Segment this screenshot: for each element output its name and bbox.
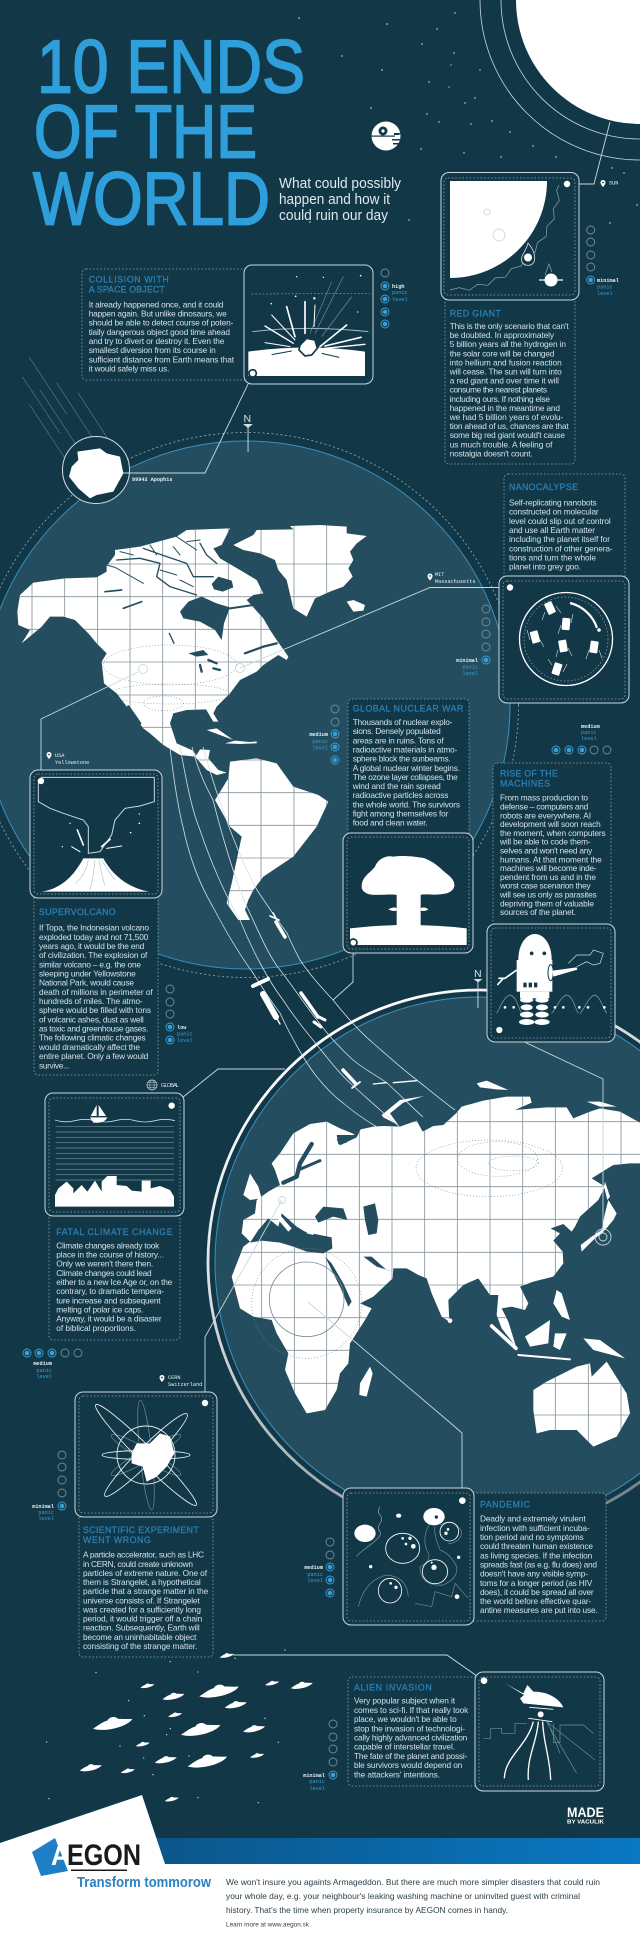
- body text: selves and won't need any: [500, 846, 593, 856]
- body text: [56, 1240, 173, 1333]
- body text: happen again. But unlike dinosaurs, we: [89, 308, 227, 318]
- panic level: low: panic: [177, 1032, 193, 1038]
- illustration: impact: [244, 265, 373, 384]
- body text: planet into grey goo.: [509, 562, 581, 572]
- body text: The following climatic changes: [39, 1033, 146, 1043]
- location: yellowstone: USA: [55, 753, 65, 759]
- panic level: minimal: level: [38, 1516, 54, 1522]
- meteor trails: [22, 357, 115, 461]
- panel: scientific experiment went wrong: [32, 1375, 217, 1657]
- panic level: low: [166, 985, 193, 1044]
- title: WORLD: [33, 156, 270, 240]
- body text: tion period and no symptoms: [480, 1532, 584, 1542]
- location: MIT: MIT: [435, 572, 444, 578]
- body text: the whole world. The survivors: [353, 799, 460, 809]
- body text: be doubted. In approximately: [450, 330, 555, 340]
- body text: it would safely miss us.: [89, 364, 169, 374]
- body text: sphere would be filled with tons: [39, 1005, 151, 1015]
- footer text: history. That's the time when property insurance by AEGON comes in handy.: [226, 1905, 508, 1915]
- subtitle: [279, 176, 402, 224]
- illustration: robot: [487, 924, 615, 1042]
- body text: reaction. Subsequently, Earth will: [83, 1623, 200, 1633]
- panel: alien invasion: [303, 1672, 604, 1792]
- leaders: [41, 122, 610, 1681]
- body text: entire planet. Only a few would: [39, 1051, 149, 1061]
- body text: of volcanic ashes, dust as well: [39, 1014, 144, 1024]
- logo: aegon: EGON: [67, 1839, 141, 1872]
- body text: in CERN, could create unknown: [83, 1559, 193, 1569]
- body text: including the planet itself for: [509, 534, 610, 544]
- location: global: [147, 1080, 179, 1090]
- panic level: high: [381, 269, 408, 328]
- body text: stop the invasion of technologi-: [354, 1723, 465, 1733]
- sun: [480, 0, 640, 160]
- body text: From mass production to: [500, 793, 588, 803]
- map: north and south america: [17, 525, 366, 920]
- body text: us much trouble. A feeling of: [450, 439, 553, 449]
- panic level: medium: panic: [312, 739, 328, 745]
- heading: MACHINES: [500, 779, 550, 789]
- body text: Self-replicating nanobots: [509, 498, 597, 508]
- location circles: [138, 664, 611, 1245]
- body text: food and clean water.: [353, 818, 428, 828]
- body text: cally highly advanced civilization: [354, 1732, 468, 1742]
- impact circle: africa: [269, 1262, 344, 1337]
- dotted radius rings: north america: [103, 645, 237, 711]
- body text: pendent from us and in the: [500, 872, 596, 882]
- location: global: GLOBAL: [161, 1083, 179, 1089]
- body text: contrary, to dramatic tempera-: [56, 1286, 164, 1296]
- body text: humans. At that moment the: [500, 854, 602, 864]
- body text: National Park, would cause: [39, 978, 134, 988]
- credit: made by vaculik: MADE: [567, 1805, 604, 1820]
- panic level: minimal: [32, 1451, 66, 1522]
- icon: rockets: [253, 913, 360, 1088]
- body text: tion ahead of us, chances are that: [450, 421, 569, 431]
- credit: made by vaculik: BY VACULIK: [567, 1820, 604, 1826]
- location: sun: [600, 180, 618, 187]
- panic level: minimal: panic: [597, 284, 613, 290]
- body text: areas are in ruins. Tons of: [353, 735, 444, 745]
- body text: happened in the meantime and: [450, 403, 560, 413]
- body text: consisting of the strange matter.: [83, 1641, 197, 1651]
- location: sun: SUN: [609, 180, 618, 186]
- body text: place, we wouldn't be able to: [354, 1714, 457, 1724]
- credit: made by vaculik: [567, 1805, 604, 1826]
- heading: GLOBAL NUCLEAR WAR: [353, 704, 463, 714]
- body text: exploded today and not 71,500: [39, 932, 149, 942]
- heading: WENT WRONG: [83, 1535, 151, 1545]
- footer text: Learn more at www.aegon.sk: [226, 1923, 310, 1929]
- illustration: nanobots: [499, 576, 629, 703]
- body text: [38, 923, 153, 1070]
- body text: Climate changes already took: [56, 1240, 160, 1250]
- body text: would dramatically affect the: [38, 1042, 140, 1052]
- panel: nanocalypse: [428, 474, 629, 703]
- body text: spreads fast (as e.g. flu does) and: [480, 1560, 597, 1570]
- illustration: mushroom cloud: [343, 833, 473, 953]
- subtitle: What could possibly: [279, 176, 402, 192]
- panic level: medium: medium: [309, 732, 328, 738]
- title: OF THE: [34, 90, 257, 174]
- panic level: minimal: minimal: [32, 1504, 54, 1510]
- location: CERN: Switzerland: [168, 1382, 202, 1388]
- panic level: medium: panic: [307, 1572, 323, 1578]
- white footer shape: [0, 1795, 640, 1943]
- subtitle: happen and how it: [279, 192, 390, 208]
- panel: red giant: [441, 172, 619, 464]
- panic level: medium: panic: [36, 1368, 52, 1374]
- heading: SCIENTIFIC EXPERIMENT: [83, 1525, 199, 1535]
- panic level: medium: level: [312, 746, 328, 752]
- illustration: flooded city: [45, 1093, 184, 1216]
- body text: universe consists of. If Strangelet: [83, 1595, 200, 1605]
- body text: sufficient distance from Earth means that: [89, 354, 235, 364]
- panel: pandemic: [304, 1488, 606, 1625]
- heading: COLLISION WITH: [89, 275, 169, 285]
- body text: Very popular subject when it: [354, 1696, 456, 1706]
- body text: machines will become inde-: [500, 863, 597, 873]
- body text: Only we weren't there then.: [56, 1259, 153, 1269]
- body text: and try to divert or destroy it. Even the: [89, 336, 225, 346]
- body text: Thousands of nuclear explo-: [353, 717, 453, 727]
- location: CERN: CERN: [168, 1375, 180, 1381]
- body text: of biblical proportions.: [56, 1323, 136, 1333]
- panic level: minimal: panic: [38, 1510, 54, 1516]
- globe: americas: [0, 432, 518, 978]
- footer: [0, 1795, 640, 1943]
- body text: The fate of the planet and possi-: [354, 1751, 468, 1761]
- panic level: medium: [304, 1538, 334, 1597]
- illustration: red giant: [441, 172, 579, 300]
- body text: [499, 793, 606, 917]
- body text: into hellium and fusion reaction: [450, 357, 562, 367]
- panic level: medium: [309, 705, 339, 764]
- panic level: minimal: minimal: [597, 278, 619, 284]
- body text: [449, 321, 569, 458]
- panel: global nuclear war: [309, 699, 473, 953]
- heading: SUPERVOLCANO: [39, 907, 116, 917]
- body text: does), it could be spread all over: [480, 1587, 594, 1597]
- location: yellowstone: Yellowstone: [55, 760, 89, 766]
- body text: radioactive materials in atmo-: [353, 744, 458, 754]
- panic level: medium: level: [307, 1578, 323, 1584]
- location: MIT: [428, 572, 475, 585]
- body text: comes to sci-fi. If that really took: [354, 1705, 469, 1715]
- body text: constructed on molecular: [509, 507, 599, 517]
- panic level: minimal: [456, 605, 490, 677]
- body text: we had 5 billion years of evolu-: [449, 412, 564, 422]
- panic level: medium: level: [581, 736, 597, 742]
- body text: survive...: [39, 1060, 69, 1070]
- body text: Climate changes could lead: [56, 1268, 152, 1278]
- panic level: minimal: level: [462, 671, 478, 677]
- body text: [352, 717, 460, 828]
- body text: the world before effective quar-: [480, 1596, 592, 1606]
- body text: particle that a strange matter in the: [83, 1586, 209, 1596]
- illustration: volcano: [30, 770, 162, 898]
- body text: including ours. If nothing else: [450, 394, 550, 404]
- body text: will be able to code them-: [499, 837, 591, 847]
- heading: NANOCALYPSE: [509, 482, 578, 492]
- globe: eurasia and africa: [200, 990, 640, 1534]
- heading: ALIEN INVASION: [354, 1683, 432, 1693]
- body text: [354, 1696, 469, 1779]
- body text: some big red giant would't cause: [450, 430, 565, 440]
- title: 10 ENDS: [37, 24, 305, 108]
- location: MIT: Massachusetts: [435, 579, 475, 585]
- body text: construction of other genera-: [509, 543, 613, 553]
- body text: years ago, it would be the end: [39, 941, 145, 951]
- body text: defense – computers and: [500, 802, 589, 812]
- body text: level could slip out of control: [509, 516, 611, 526]
- body text: infection with sufficient incuba-: [480, 1523, 590, 1533]
- panic level: minimal: minimal: [456, 658, 478, 664]
- blue band: [150, 1838, 640, 1864]
- body text: fight among themselves for: [353, 808, 449, 818]
- body text: of civilization. The explosion of: [39, 950, 148, 960]
- compass north: americas: [243, 413, 253, 452]
- body text: radioactive particles across: [353, 790, 448, 800]
- body text: ble survivors would depend on: [354, 1760, 463, 1770]
- body text: them is Strangelet, a hypothetical: [83, 1577, 201, 1587]
- compass north: americas: N: [244, 413, 251, 425]
- body text: A particle accelerator, such as LHC: [83, 1550, 204, 1560]
- body text: hundreds of miles. The atmo-: [39, 996, 143, 1006]
- label: apophis: 99942 Apophis: [132, 477, 172, 483]
- subtitle: could ruin our day: [279, 208, 389, 224]
- body text: death of millions in perimeter of: [39, 987, 153, 997]
- body text: sphere block the sunbeams.: [353, 754, 451, 764]
- body text: [480, 1514, 598, 1615]
- illustration: atom around earth: [75, 1392, 217, 1517]
- body text: as toxic and greenhouse gases.: [39, 1024, 148, 1034]
- body text: Deadly and extremely virulent: [480, 1514, 586, 1524]
- body text: If Topa, the Indonesian volcano: [39, 923, 149, 933]
- asteroid apophis: [22, 357, 172, 504]
- body text: [82, 1550, 209, 1651]
- panic level: medium: [23, 1349, 82, 1380]
- panic level: medium: level: [36, 1374, 52, 1380]
- body text: melting of polar ice caps.: [56, 1304, 143, 1314]
- body text: similar volcano – e.g. the one: [39, 959, 141, 969]
- body text: will cease. The sun will turn into: [449, 366, 562, 376]
- body text: could threaten human existence: [480, 1541, 593, 1551]
- panic level: low: level: [177, 1038, 193, 1044]
- footer text: We won't insure you againts Armageddon. But there are much more simpler disasters that could ruin: [226, 1877, 600, 1887]
- body text: tially dangerous object good time ahead: [89, 327, 230, 337]
- footer text: your whole day, e.g. your neighbour's leaking washing machine or uninvited guest with criminal: [226, 1891, 580, 1901]
- ufo fleet: [46, 1649, 313, 1803]
- logo: aegon: A: [51, 1839, 70, 1872]
- panel: rise of the machines: [487, 724, 615, 1042]
- tagline: Transform tommorow: [77, 1874, 211, 1891]
- location: yellowstone: [46, 752, 89, 766]
- body text: period, it would trigger off a chain: [83, 1614, 203, 1624]
- heading: A SPACE OBJECT: [89, 285, 165, 295]
- body text: worst case scenarion they: [499, 881, 592, 891]
- compass north: eurasia: N: [474, 968, 482, 980]
- body text: the solar core will be changed: [450, 348, 555, 358]
- trajectories and rockets: [170, 747, 455, 1127]
- body text: should be able to detect course of poten-: [89, 318, 234, 328]
- logo: aegon: [32, 1838, 141, 1876]
- body text: development will soon reach: [500, 819, 601, 829]
- panel: supervolcano: [30, 752, 193, 1075]
- body text: and use all Earth matter: [509, 525, 595, 535]
- panic level: low: low: [177, 1025, 187, 1031]
- body text: either to a new Ice Age or, on the: [56, 1277, 173, 1287]
- body text: the attackers' intentions.: [354, 1769, 440, 1779]
- body text: It already happened once, and it could: [89, 299, 224, 309]
- heading: PANDEMIC: [480, 1500, 531, 1510]
- body text: sions. Densely populated: [353, 726, 441, 736]
- panel: collision with a space object: [82, 265, 408, 384]
- body text: place in the course of history...: [56, 1250, 164, 1260]
- panic level: high: high: [392, 284, 404, 290]
- body text: sources of the planet.: [500, 907, 576, 917]
- panic level: medium: panic: [581, 730, 597, 736]
- panic level: high: panic: [392, 290, 408, 296]
- title: [33, 24, 305, 240]
- body text: was created for a sufficiently long: [82, 1604, 201, 1614]
- body text: doesn't have any visible symp-: [480, 1569, 588, 1579]
- body text: [509, 498, 613, 572]
- panic level: medium: [552, 724, 611, 754]
- body text: Anyway, it would be a disaster: [56, 1314, 162, 1324]
- illustration: cells: [343, 1488, 474, 1625]
- body text: capable of interstellar travel.: [354, 1742, 455, 1752]
- panic level: medium: medium: [581, 724, 600, 730]
- body text: The ozone layer collapses, the: [353, 772, 458, 782]
- icon: death star: [371, 122, 401, 150]
- body text: This is the only scenario that can't: [450, 321, 569, 331]
- body text: sleeping under Yellowstone: [39, 969, 136, 979]
- body text: A global nuclear winter begins.: [353, 763, 460, 773]
- heading: [89, 275, 169, 295]
- map: eurasia, africa, australia: [232, 1080, 640, 1447]
- body text: tions and turn the whole: [509, 552, 596, 562]
- body text: [89, 299, 235, 374]
- panic level: minimal: [587, 226, 619, 297]
- footer text: [226, 1877, 600, 1929]
- body text: 5 billion years all the hydrogen in: [450, 339, 566, 349]
- body text: a red giant and over time it will: [450, 376, 559, 386]
- body text: become an uninhabitable object: [83, 1632, 197, 1642]
- body text: as living species. If the infection: [480, 1550, 593, 1560]
- body text: nostalgia doesn't count.: [450, 448, 533, 458]
- panic level: medium: medium: [304, 1565, 323, 1571]
- body text: wind and the rain spread: [352, 781, 441, 791]
- panic level: high: level: [392, 297, 408, 303]
- body text: robots are everywhere. AI: [500, 810, 591, 820]
- body text: will see us only as parasites: [499, 890, 597, 900]
- panic level: minimal: [303, 1720, 337, 1792]
- panic level: minimal: level: [309, 1786, 325, 1792]
- illustration: tripod: [475, 1672, 604, 1791]
- body text: particles of extreme nature. One of: [83, 1568, 208, 1578]
- panic level: medium: medium: [33, 1361, 52, 1367]
- heading: FATAL CLIMATE CHANGE: [56, 1227, 173, 1237]
- location: CERN: [160, 1375, 202, 1388]
- heading: [500, 769, 558, 789]
- heading: [83, 1525, 199, 1545]
- panic level: minimal: minimal: [303, 1773, 325, 1779]
- compass north: eurasia: [474, 968, 482, 1008]
- panel: fatal climate change: [23, 1080, 184, 1380]
- dotted radius rings: eurasia: [252, 1140, 563, 1358]
- body text: toms for a longer period (as HIV: [480, 1578, 593, 1588]
- body text: antine measures are put into use.: [480, 1605, 598, 1615]
- body text: consume the nearest planets: [450, 385, 547, 395]
- body text: smallest diversion from its course in: [89, 345, 216, 355]
- heading: RED GIANT: [450, 308, 501, 318]
- body text: the moment, when computers: [500, 828, 606, 838]
- panic level: minimal: panic: [309, 1779, 325, 1785]
- panic level: minimal: panic: [462, 664, 478, 670]
- starfield: [298, 12, 638, 224]
- panic level: minimal: level: [597, 291, 613, 297]
- body text: depriving them of valuable: [500, 898, 594, 908]
- body text: ture increase and subsequent: [56, 1295, 161, 1305]
- heading: RISE OF THE: [500, 769, 558, 779]
